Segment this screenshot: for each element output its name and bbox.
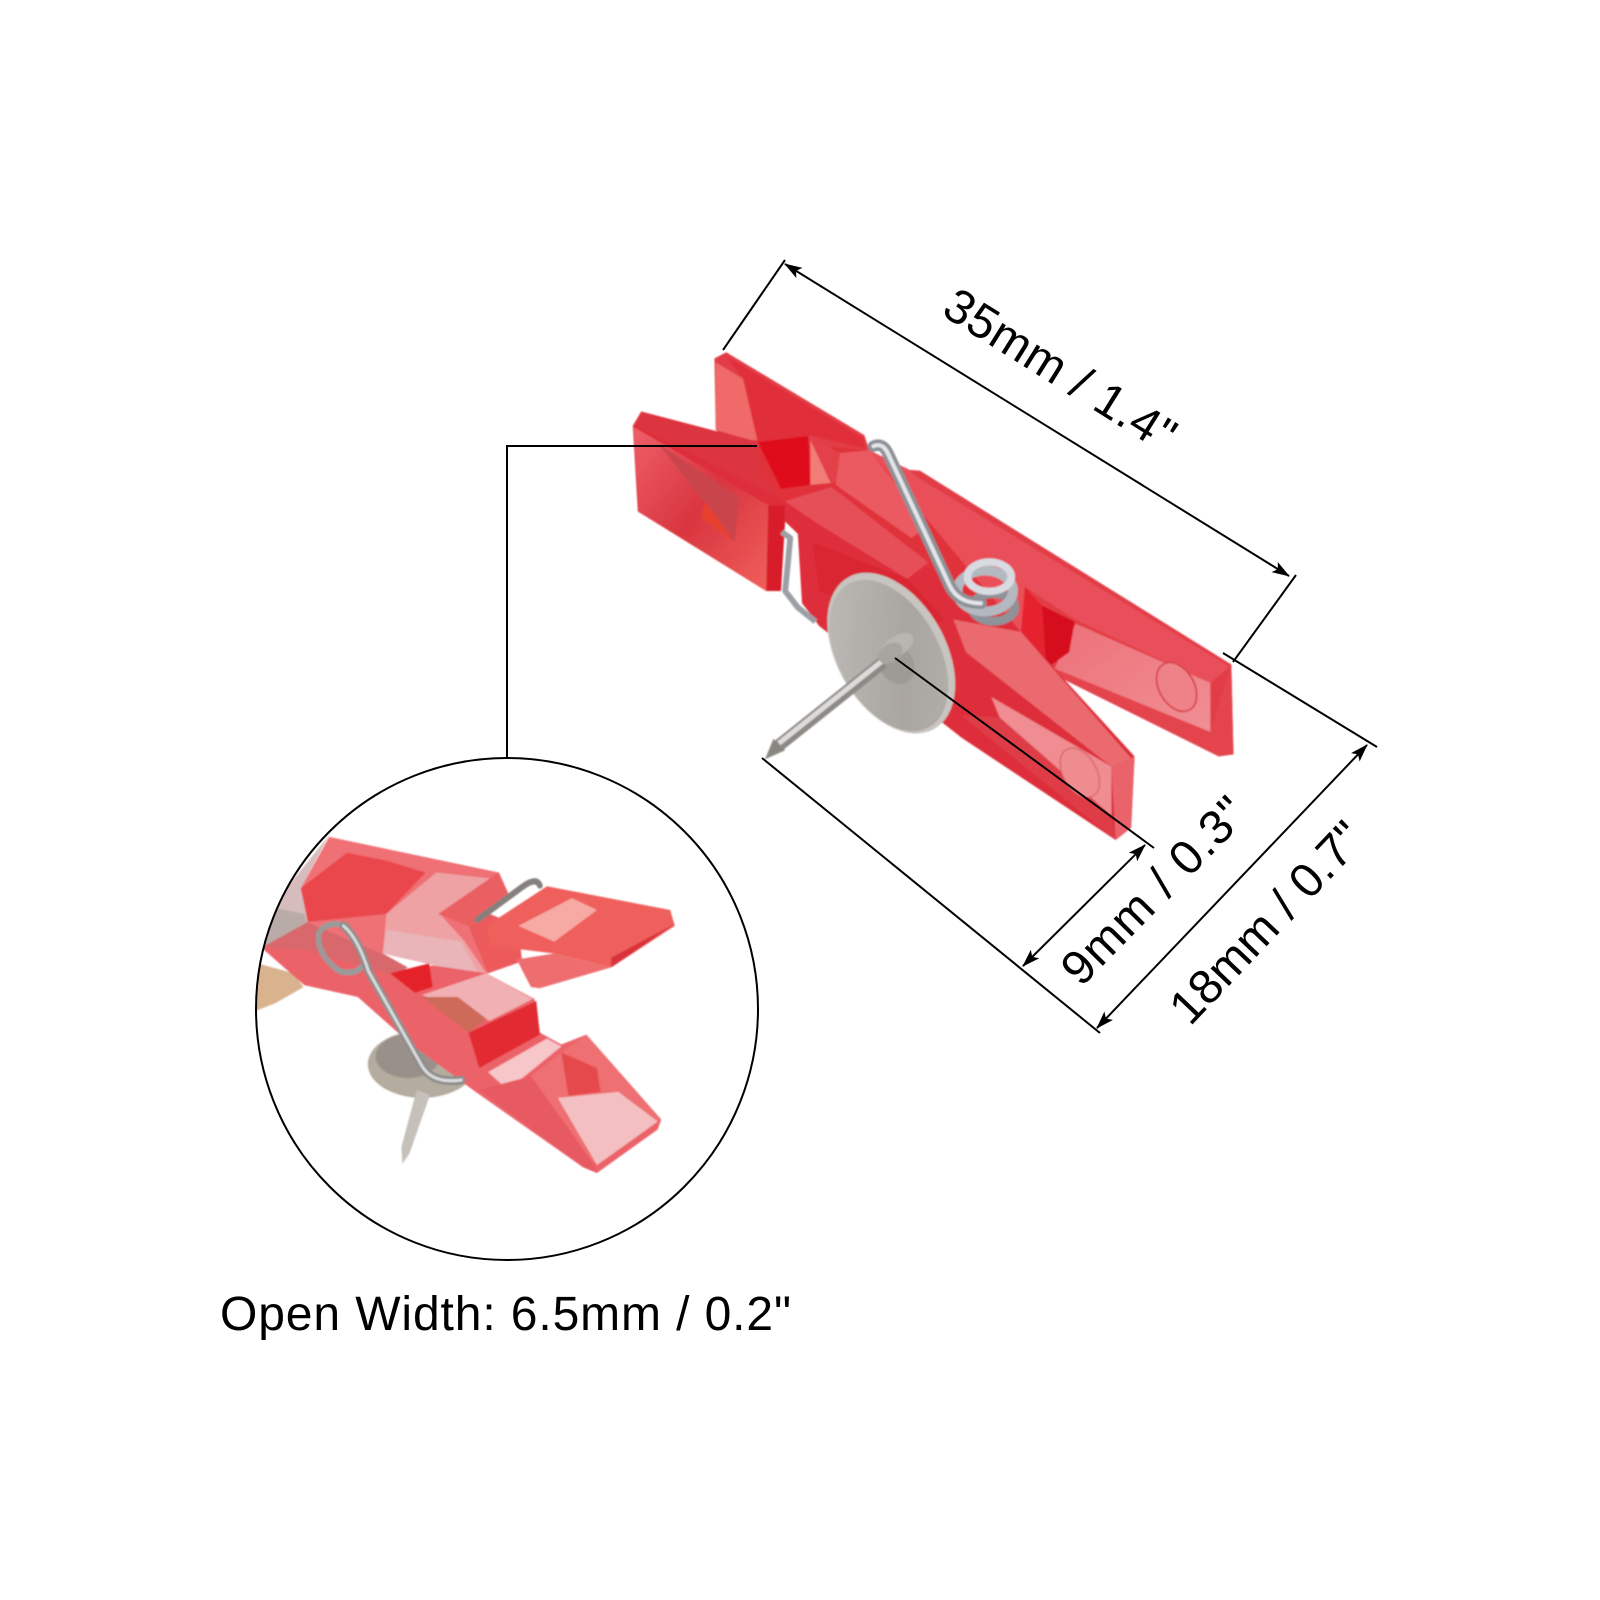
upper jaw <box>301 837 675 988</box>
dimension: pin height 9mm <box>895 658 1154 966</box>
caption: open width: Open Width: 6.5mm / 0.2" <box>220 1288 791 1341</box>
label: 18mm: 18mm / 0.7" <box>1160 812 1375 1035</box>
label: 9mm: 9mm / 0.3" <box>1051 787 1258 996</box>
pin needle <box>401 1090 430 1164</box>
main photo: red clip with push pin <box>633 352 1233 840</box>
lower jaw <box>261 922 661 1173</box>
dimension: width 18mm <box>762 653 1377 1033</box>
clip body fill <box>752 440 1021 632</box>
clip centre pocket <box>758 436 928 538</box>
push pin needle <box>765 638 907 759</box>
small wire at left <box>782 532 816 622</box>
push pin disc <box>801 552 981 754</box>
grey clip end <box>265 836 329 946</box>
dimension: length 35mm <box>723 260 1296 662</box>
spring lever wire <box>318 924 461 1081</box>
circle photo <box>251 835 675 1173</box>
front arm of clip <box>633 411 1135 840</box>
spring lever wire <box>874 445 981 603</box>
spring coil <box>957 562 1015 621</box>
circle outline <box>256 758 758 1260</box>
detail circle: open clip <box>251 758 758 1260</box>
background finger <box>257 964 304 1012</box>
pin disc <box>368 1031 476 1098</box>
back arm of clip <box>714 352 1233 756</box>
leader line from clip jaw to circle <box>507 446 757 758</box>
label: 35mm: 35mm / 1.4" <box>934 278 1185 463</box>
small wire <box>477 881 540 920</box>
